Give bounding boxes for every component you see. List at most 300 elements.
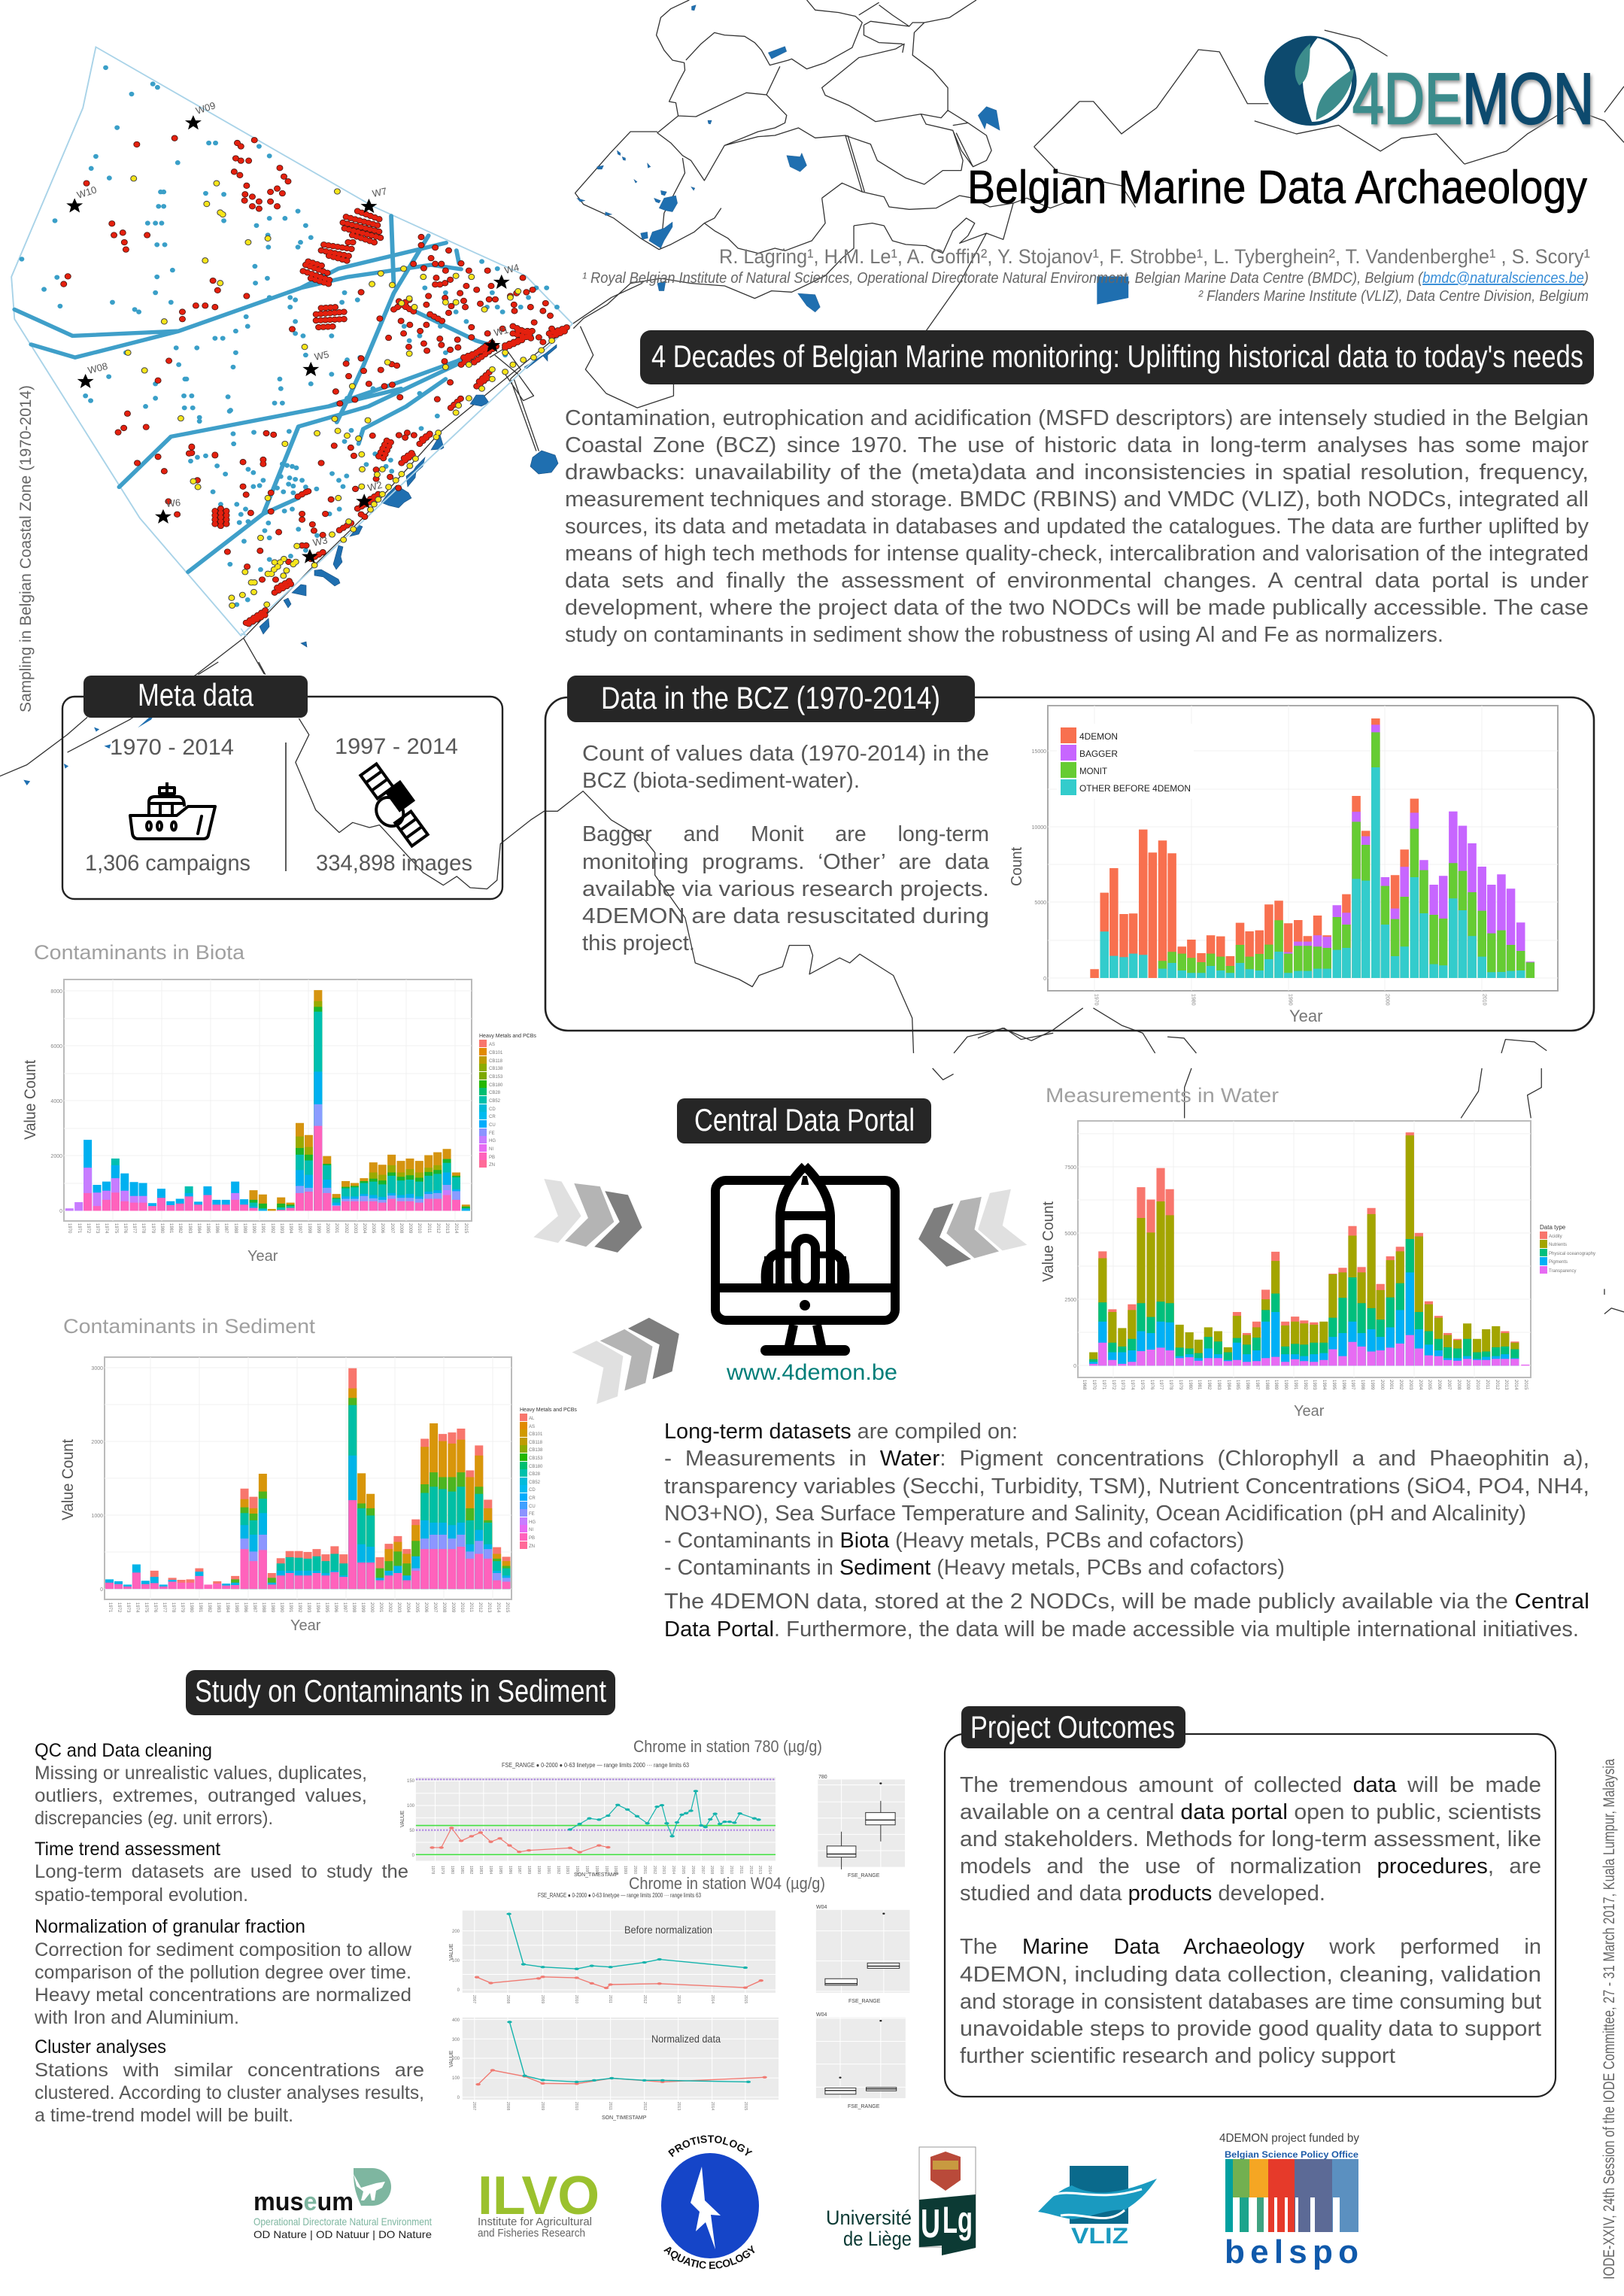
text: normalization: Heavy metal concentrations are normalized: [35, 1985, 411, 2006]
stacked bar chart: measurements in water: 2013: [1504, 1380, 1508, 1390]
stacked bar chart: measurements in water: 1991: [1293, 1380, 1298, 1390]
text: normalization: [34, 1916, 412, 2028]
stacked bar chart: contaminants in sediment: 2000: [369, 1602, 374, 1613]
line chart: chrome 780: 1985: [498, 1866, 502, 1874]
text: data description: available via various research projects.: [582, 877, 989, 901]
line chart: chrome 780: [400, 1762, 776, 1878]
stacked bar chart: contaminants in sediment: 1971: [108, 1602, 112, 1613]
stacked bar chart: measurements in water: 2006: [1437, 1380, 1441, 1390]
stacked bar chart: measurements in water: 2011: [1485, 1380, 1489, 1390]
text: cluster analyses: a time-trend model will be built.: [35, 2105, 293, 2126]
stacked bar chart: contaminants in biota: 2002: [344, 1223, 348, 1234]
text: long-term datasets: transparency variables (Secchi, Turbidity, TSM), Nutrient Concentrations (SiO4, PO4, NH4,: [664, 1474, 1589, 1499]
legend: data type: Data type: [1540, 1224, 1566, 1231]
panel: data in the BCZ: [545, 676, 1594, 1031]
heading: contaminants in biota: Contaminants in Biota: [34, 941, 245, 964]
legend: sediment: Heavy Metals and PCBs: [520, 1408, 577, 1413]
land patches along coast: [260, 345, 558, 647]
stacked bar chart: contaminants in biota: 1976: [123, 1223, 127, 1234]
line chart: chrome 780: 1986: [508, 1866, 512, 1874]
line chart: chrome 780: 1990: [536, 1866, 541, 1874]
legend: biota: [479, 1034, 536, 1168]
stacked bar chart: measurements in water: 2012: [1495, 1380, 1499, 1390]
stacked bar chart: counts 1970-2014: 2000: [1384, 994, 1390, 1006]
legend: sediment: NI: [529, 1528, 533, 1532]
legend: biota: HG: [489, 1139, 496, 1143]
stacked bar chart: contaminants in sediment: 2013: [487, 1602, 491, 1613]
line chart: normalized data: 2014: [710, 2102, 715, 2110]
stacked bar chart: contaminants in biota: 1990: [251, 1223, 256, 1234]
line chart: before normalization: 2010: [574, 1995, 578, 2003]
stacked bar chart: measurements in water: 2005: [1427, 1380, 1431, 1390]
logo: Université de Liège: [826, 2147, 976, 2255]
stacked bar chart: counts 1970-2014: 1970: [1094, 994, 1098, 1006]
stacked bar chart: contaminants in biota: 2009: [408, 1223, 412, 1234]
sampling map: Belgian Coastal Zone: W08: [87, 360, 109, 376]
logo: VLIZ: VLIZ: [1071, 2224, 1128, 2249]
text: outcomes: further scientific research and policy support: [960, 2044, 1395, 2068]
stacked bar chart: contaminants in sediment: 2006: [423, 1602, 428, 1613]
legend: sediment: ZN: [529, 1544, 535, 1549]
stacked bar chart: measurements in water: 1984: [1226, 1380, 1231, 1390]
stacked bar chart: contaminants in biota: 1988: [233, 1223, 238, 1234]
text: outcomes: The Marine Data Archaeology work performed in: [960, 1935, 1541, 1959]
stacked bar chart: contaminants in biota: 1994: [288, 1223, 293, 1234]
introduction paragraph: Coastal Zone (BCZ) since 1970. The use of historic data in long-term analyses has some major: [565, 433, 1589, 457]
legend: biota: CB153: [489, 1075, 503, 1080]
boxplot: before normalization: FSE_RANGE: [848, 1999, 881, 2004]
logo: VLIZ: [1038, 2166, 1157, 2249]
stacked bar chart: contaminants in sediment: 1995: [324, 1602, 329, 1613]
legend: sediment: CB28: [529, 1472, 541, 1477]
sampling map: Belgian Coastal Zone: W6: [165, 497, 181, 509]
stacked bar chart: contaminants in biota: 2012: [436, 1223, 440, 1234]
stacked bar chart: contaminants in sediment: 1988: [261, 1602, 266, 1613]
legend: biota: CB138: [489, 1067, 503, 1071]
legend: data type: Pigments: [1549, 1260, 1568, 1265]
line chart: chrome 780: 2008: [709, 1866, 714, 1874]
line chart: normalized data: 2010: [574, 2102, 578, 2110]
icon: satellite: [352, 759, 435, 852]
stacked bar chart: measurements in water: [1040, 1121, 1595, 1420]
stacked bar chart: measurements in water: 2500: [1064, 1298, 1076, 1303]
legend: data source: BAGGER: [1079, 749, 1118, 759]
boxplot: chrome 780: [818, 1775, 905, 1878]
line chart: chrome 780: 2002: [652, 1866, 657, 1874]
stacked bar chart: counts 1970-2014: 1980: [1190, 994, 1196, 1006]
legend: data source: OTHER BEFORE 4DEMON: [1079, 783, 1191, 794]
line chart: normalized data: 2009: [540, 2102, 545, 2110]
logo: Université de Liège: de Liège: [843, 2228, 912, 2250]
stacked bar chart: contaminants in biota: Year: [247, 1248, 278, 1265]
stacked bar chart: measurements in water: 1972: [1111, 1380, 1116, 1390]
stacked bar chart: contaminants in sediment: 1976: [153, 1602, 157, 1613]
line chart: chrome 780: 1987: [517, 1866, 521, 1874]
stacked bar chart: measurements in water: 1993: [1312, 1380, 1316, 1390]
line chart: chrome 780: SON_TIMESTAMP: [574, 1872, 619, 1878]
stacked bar chart: contaminants in sediment: 1978: [171, 1602, 175, 1613]
stacked bar chart: measurements in water: 2007: [1446, 1380, 1451, 1390]
stacked bar chart: contaminants in biota: 2003: [353, 1223, 357, 1234]
logo: belspo: [1219, 2132, 1359, 2270]
text: cluster analyses: clustered. According to cluster analyses results,: [35, 2082, 424, 2103]
line chart: chrome 780: 2004: [671, 1866, 675, 1874]
stacked bar chart: measurements in water: 1970: [1091, 1380, 1096, 1390]
line chart: normalized data: VALUE: [449, 2050, 454, 2067]
stacked bar chart: contaminants in sediment: 2010: [460, 1602, 464, 1613]
stacked bar chart: contaminants in biota: [22, 979, 536, 1265]
logo: ILVO: Institute for Agricultural: [478, 2216, 592, 2228]
stacked bar chart: measurements in water: 1968: [1082, 1380, 1086, 1390]
line chart: before normalization: 2012: [642, 1995, 647, 2003]
stacked bar chart: contaminants in sediment: 1989: [270, 1602, 275, 1613]
stacked bar chart: contaminants in sediment: 1993: [306, 1602, 311, 1613]
text: cluster analyses: Cluster analyses: [35, 2036, 166, 2058]
heading: contaminants in sediment: Contaminants in Sediment: [63, 1315, 316, 1338]
panel: meta data: 334,898 images: [316, 851, 472, 876]
stacked bar chart: contaminants in biota: 1980: [159, 1223, 164, 1234]
legend: sediment: CU: [529, 1505, 536, 1509]
chart title: chrome 780: Chrome in station 780 (µg/g): [633, 1737, 822, 1756]
introduction paragraph: study on contaminants in sediment show the robustness of using Al and Fe as normalizers.: [565, 623, 1443, 647]
stacked bar chart: measurements in water: 1986: [1245, 1380, 1249, 1390]
stacked bar chart: contaminants in biota: 2014: [454, 1223, 458, 1234]
stacked bar chart: contaminants in sediment: 1982: [207, 1602, 211, 1613]
stacked bar chart: contaminants in sediment: 1990: [279, 1602, 284, 1613]
introduction paragraph: measurement techniques and storage. BMDC (RBINS) and VMDC (VLIZ), both NODCs, integrated all: [565, 487, 1589, 512]
stacked bar chart: measurements in water: 1996: [1341, 1380, 1346, 1390]
logo: ILVO: ILVO: [478, 2166, 600, 2226]
arrows: chevrons towards portal: [533, 1179, 1027, 1404]
stacked bar chart: contaminants in sediment: 2004: [405, 1602, 410, 1613]
authors: R. Lagring¹, H.M. Le¹, A. Goffin², Y. Stojanov¹, F. Strobbe¹, L. Tyberghein², T. Vandenberghe¹ , S. Scory¹: [719, 245, 1590, 268]
text: normalization: Correction for sediment composition to allow: [35, 1939, 412, 1960]
sampling map: Belgian Coastal Zone: W3: [312, 534, 329, 548]
stacked bar chart: contaminants in sediment: 1975: [144, 1602, 148, 1613]
stacked bar chart: contaminants in sediment: 2005: [414, 1602, 419, 1613]
stacked bar chart: contaminants in biota: 0: [59, 1209, 62, 1214]
stacked bar chart: contaminants in sediment: Value Count: [59, 1439, 77, 1520]
heading: study on contaminants in sediment: Study on Contaminants in Sediment: [195, 1673, 606, 1708]
stacked bar chart: contaminants in sediment: 2015: [505, 1602, 509, 1613]
boxplot: before normalization: [816, 1905, 909, 2004]
line chart: before normalization: 2011: [608, 1995, 612, 2003]
sampling map: Belgian Coastal Zone: W2: [366, 479, 384, 494]
stacked bar chart: measurements in water: 5000: [1064, 1232, 1076, 1237]
text: time trend assessment: [35, 1839, 408, 1906]
line chart: normalized data: 2008: [505, 2102, 510, 2110]
line chart: before normalization: Before normalization: [624, 1924, 712, 1936]
line chart: chrome 780: 1984: [488, 1866, 493, 1874]
legend: biota: CB118: [489, 1059, 503, 1064]
stacked bar chart: contaminants in biota: 2010: [417, 1223, 421, 1234]
line chart: before normalization: 2013: [676, 1995, 681, 2003]
text: long-term datasets: Data Portal. Furthermore, the data will be made accessible via multiple international initiatives.: [664, 1617, 1579, 1642]
stacked bar chart: measurements in water: 1987: [1255, 1380, 1259, 1390]
affiliations: ² Flanders Marine Institute (VLIZ), Data Centre Division, Belgium: [1198, 288, 1589, 305]
line chart: chrome 780: 2003: [661, 1866, 666, 1874]
line chart: before normalization: 100: [452, 1959, 460, 1963]
line chart: normalized data: 2011: [608, 2102, 612, 2110]
stacked bar chart: contaminants in sediment: 1998: [351, 1602, 356, 1613]
line chart: chrome 780: 1981: [460, 1866, 464, 1874]
stacked bar chart: contaminants in biota: 2004: [362, 1223, 366, 1234]
stacked bar chart: contaminants in sediment: 2009: [451, 1602, 455, 1613]
line chart: normalized data: 2007: [472, 2102, 476, 2110]
stacked bar chart: measurements in water: 1980: [1188, 1380, 1192, 1390]
stacked bar chart: measurements in water: 2001: [1389, 1380, 1393, 1390]
text: normalization: Normalization of granular fraction: [35, 1916, 305, 1937]
legend: sediment: AL: [529, 1417, 535, 1421]
line chart: chrome 780: 2001: [642, 1866, 647, 1874]
line chart: before normalization: 2009: [540, 1995, 545, 2003]
heading: central data portal: [677, 1098, 931, 1143]
text: long-term datasets: The 4DEMON data, stored at the 2 NODCs, will be made publicly available via the Central: [664, 1590, 1589, 1614]
boxplot: before normalization: W04: [816, 1905, 827, 1910]
line chart: chrome 780: 2009: [719, 1866, 724, 1874]
stacked bar chart: contaminants in biota: 2008: [399, 1223, 403, 1234]
text: long-term datasets: Long-term datasets are compiled on:: [664, 1420, 1018, 1444]
survey tracks: [14, 216, 492, 572]
panel: meta data: 1997 - 2014: [335, 734, 458, 759]
stacked bar chart: counts 1970-2014: 15000: [1032, 749, 1046, 755]
stacked bar chart: contaminants in biota: 1989: [242, 1223, 247, 1234]
line chart: chrome 780: 2007: [700, 1866, 705, 1874]
text: long-term datasets: NO3+NO), Sea Surface Temperature and Salinity, Ocean Acidification (pH and Alcalinity): [664, 1502, 1526, 1526]
stacked bar chart: measurements in water: 2010: [1475, 1380, 1480, 1390]
stacked bar chart: contaminants in biota: 1997: [297, 1223, 302, 1234]
vertical caption: IODE session: IODE-XXIV, 24th Session of the IODE Committee, 27 - 31 March 2017, Kuala Lumpur, Malaysia: [1601, 1759, 1618, 2279]
stacked bar chart: counts 1970-2014: 2010: [1482, 994, 1486, 1006]
stacked bar chart: measurements in water: 1994: [1322, 1380, 1326, 1390]
line chart: normalized data: 2013: [676, 2102, 681, 2110]
legend: biota: CB52: [489, 1099, 501, 1104]
text: data description: [582, 742, 990, 955]
stacked bar chart: measurements in water: 1982: [1207, 1380, 1211, 1390]
stacked bar chart: contaminants in sediment: 2012: [478, 1602, 482, 1613]
boxplot: normalized data: [816, 2012, 906, 2109]
introduction paragraph: development, where the project data of the two NODCs will be made publically accessible. The case: [565, 596, 1589, 620]
line chart: chrome 780: 2005: [681, 1866, 685, 1874]
stacked bar chart: measurements in water: 2009: [1465, 1380, 1470, 1390]
heading: measurements in water: Measurements in Water: [1046, 1084, 1279, 1107]
sampling map: Belgian Coastal Zone: W09: [194, 99, 217, 117]
line chart: chrome 780: 1978: [430, 1866, 435, 1874]
stacked bar chart: measurements in water: 2000: [1380, 1380, 1384, 1390]
stacked bar chart: contaminants in sediment: 2014: [496, 1602, 500, 1613]
line chart: chrome 780: 1998: [613, 1866, 618, 1874]
legend: sediment: CD: [529, 1488, 536, 1493]
legend: biota: CB101: [489, 1051, 503, 1055]
text: data description: BCZ (biota-sediment-water).: [582, 769, 860, 793]
stacked bar chart: contaminants in biota: 1992: [270, 1223, 275, 1234]
stacked bar chart: measurements in water: 1989: [1273, 1380, 1278, 1390]
legend: biota: CB180: [489, 1083, 503, 1088]
stacked bar chart: contaminants in sediment: 1977: [162, 1602, 166, 1613]
line chart: before normalization: 0: [457, 1988, 460, 1993]
stacked bar chart: contaminants in biota: 1978: [141, 1223, 145, 1234]
introduction paragraph: sources, its data and metadata in databases and updated the catalogues. The data are further uplifted by: [565, 515, 1589, 539]
line chart: normalized data: SON_TIMESTAMP: [602, 2115, 647, 2121]
stacked bar chart: counts 1970-2014: 10000: [1032, 825, 1046, 831]
stacked bar chart: measurements in water: 0: [1073, 1364, 1076, 1369]
panel: meta data: 1970 - 2014: [110, 735, 234, 760]
legend: sediment: HG: [529, 1520, 536, 1525]
line chart: normalized data: 400: [452, 2018, 460, 2023]
stacked bar chart: measurements in water: 1976: [1149, 1380, 1154, 1390]
stacked bar chart: contaminants in sediment: 1986: [243, 1602, 247, 1613]
stacked bar chart: contaminants in sediment: 1972: [117, 1602, 121, 1613]
legend: sediment: CB180: [529, 1465, 543, 1469]
blue stations: [22, 68, 557, 605]
line chart: before normalization: VALUE: [449, 1943, 454, 1960]
text: QC and data cleaning: discrepancies (eg. unit errors).: [35, 1808, 273, 1829]
stacked bar chart: measurements in water: 1981: [1197, 1380, 1201, 1390]
icon: monitor with rocket: [715, 1166, 895, 1356]
legend: biota: CB28: [489, 1091, 501, 1095]
logo: museum: Operational Directorate Natural Environment: [253, 2216, 432, 2228]
stacked bar chart: contaminants in biota: 2015: [463, 1223, 468, 1234]
stacked bar chart: contaminants in biota: 1984: [196, 1223, 201, 1234]
legend: biota: NI: [489, 1147, 493, 1152]
chart title: chrome W04: Chrome in station W04 (µg/g): [629, 1874, 825, 1893]
text: long-term datasets: - Measurements in Water: Pigment concentrations (Chlorophyll a and Phaeophitin a),: [664, 1447, 1589, 1471]
icon: ship: [130, 782, 215, 839]
stacked bar chart: measurements in water: 1977: [1158, 1380, 1163, 1390]
4DEMON logo: [1264, 36, 1594, 139]
line chart: chrome 780: 150: [407, 1779, 415, 1784]
stacked bar chart: contaminants in biota: 1985: [205, 1223, 210, 1234]
text: outcomes: The tremendous amount of collected data will be made: [960, 1773, 1541, 1797]
text: long-term datasets: - Contaminants in Biota (Heavy metals, PCBs and cofactors): [664, 1529, 1244, 1553]
stacked bar chart: measurements in water: 2002: [1398, 1380, 1403, 1390]
url: 4demon.be: www.4demon.be: [726, 1360, 897, 1385]
stacked bar chart: contaminants in sediment: 0: [100, 1587, 103, 1593]
line chart: before normalization: 2008: [505, 1995, 510, 2003]
introduction paragraph: drawbacks: unavailability of the (meta)data and inconsistencies in spatial resolution, frequency,: [565, 460, 1589, 484]
stacked bar chart: measurements in water: 1974: [1130, 1380, 1134, 1390]
stacked bar chart: contaminants in biota: 1970: [67, 1223, 71, 1234]
legend: biota: CU: [489, 1123, 496, 1128]
logo: museum: OD Nature | OD Natuur | DO Nature: [253, 2228, 432, 2240]
heading: meta data: [83, 676, 308, 718]
stacked bar chart: measurements in water: 2014: [1513, 1380, 1518, 1390]
legend: data type: Transparency: [1549, 1269, 1576, 1274]
stacked bar chart: contaminants in sediment: 1980: [189, 1602, 193, 1613]
stacked bar chart: contaminants in sediment: 1984: [225, 1602, 229, 1613]
text: QC and data cleaning: outliers, extremes, outranged values,: [35, 1785, 367, 1806]
stacked bar chart: contaminants in biota: 2000: [325, 1223, 329, 1234]
stacked bar chart: measurements in water: 1975: [1140, 1380, 1144, 1390]
line chart: normalized data: 0: [457, 2096, 460, 2100]
stacked bar chart: contaminants in biota: 1999: [316, 1223, 320, 1234]
sampling map: Belgian Coastal Zone: W5: [314, 348, 330, 363]
logo: Université de Liège: Université: [826, 2206, 912, 2229]
stacked bar chart: contaminants in biota: 2007: [390, 1223, 394, 1234]
stacked bar chart: contaminants in biota: 1979: [150, 1223, 155, 1234]
stacked bar chart: contaminants in sediment: 1981: [198, 1602, 202, 1613]
stacked bar chart: contaminants in biota: 1983: [187, 1223, 192, 1234]
sampling map: Belgian Coastal Zone: [11, 47, 572, 647]
legend: sediment: CB118: [529, 1441, 543, 1445]
legend: sediment: CB153: [529, 1456, 543, 1461]
stacked bar chart: measurements in water: 1973: [1120, 1380, 1125, 1390]
vertical caption: sampling: Sampling in Belgian Coastal Zone (1970-2014): [17, 385, 35, 712]
legend: data type: Physical oceanography: [1549, 1252, 1595, 1256]
line chart: chrome 780: 50: [409, 1829, 415, 1833]
text: time trend assessment: Long-term datasets are used to study the: [35, 1861, 408, 1882]
legend: sediment: CB52: [529, 1481, 541, 1485]
text: long-term datasets: - Contaminants in Sediment (Heavy metals, PCBs and cofactors): [664, 1556, 1285, 1580]
line chart: chrome 780: 1996: [594, 1866, 599, 1874]
logo: ILVO: and Fisheries Research: [478, 2227, 585, 2240]
stacked bar chart: contaminants in biota: 2006: [380, 1223, 384, 1234]
legend: biota: AS: [489, 1043, 495, 1047]
line chart: chrome 780: 2010: [729, 1866, 733, 1874]
legend: data source: [1057, 724, 1194, 799]
line chart: chrome 780: 1999: [623, 1866, 627, 1874]
text: outcomes: and storage in consistent databases are time consuming but: [960, 1990, 1541, 2014]
stacked bar chart: contaminants in sediment: 1991: [288, 1602, 293, 1613]
stacked bar chart: contaminants in sediment: 2002: [387, 1602, 392, 1613]
stacked bar chart: counts 1970-2014: [1009, 706, 1558, 1025]
legend: sediment: FE: [529, 1512, 535, 1517]
stacked bar chart: measurements in water: 1999: [1370, 1380, 1374, 1390]
stacked bar chart: contaminants in sediment: 2003: [396, 1602, 401, 1613]
stacked bar chart: contaminants in biota: 1982: [178, 1223, 182, 1234]
sampling map: Belgian Coastal Zone: W4: [503, 262, 521, 276]
legend: data type: [1540, 1224, 1595, 1274]
stacked bar chart: contaminants in sediment: 2011: [469, 1602, 473, 1613]
line chart: chrome 780: 2006: [691, 1866, 695, 1874]
line chart: normalized data: 2015: [743, 2102, 748, 2110]
banner: 4 decades: [640, 330, 1594, 384]
text: data description: monitoring programs. ‘Other’ are data: [582, 850, 990, 874]
stacked bar chart: contaminants in biota: 2013: [445, 1223, 449, 1234]
heading: data in the BCZ: Data in the BCZ (1970-2014): [601, 680, 940, 715]
line chart: normalized data: 300: [452, 2038, 460, 2042]
line chart: chrome 780: 2000: [633, 1866, 637, 1874]
stacked bar chart: contaminants in sediment: 1974: [135, 1602, 139, 1613]
logo: belspo: 4DEMON project funded by: [1219, 2132, 1359, 2145]
line chart: before normalization: [449, 1892, 776, 2003]
red stations: [64, 138, 570, 624]
yellow stations: [128, 178, 552, 606]
stacked bar chart: measurements in water: 2008: [1456, 1380, 1461, 1390]
logo: belspo: Belgian Science Policy Office: [1225, 2149, 1358, 2160]
stacked bar chart: contaminants in biota: 1998: [307, 1223, 311, 1234]
arrow: from sediment: [572, 1318, 679, 1404]
legend: sediment: CB138: [529, 1448, 543, 1453]
stacked bar chart: contaminants in sediment: 1996: [333, 1602, 338, 1613]
line chart: chrome 780: 1980: [450, 1866, 454, 1874]
boxplot: normalized data: FSE_RANGE: [848, 2104, 880, 2109]
4DEMON logo: 4DEMON: [1352, 59, 1594, 139]
stacked bar chart: contaminants in sediment: 1994: [315, 1602, 320, 1613]
stacked bar chart: contaminants in biota: 1993: [279, 1223, 284, 1234]
line chart: chrome 780: 1989: [527, 1866, 531, 1874]
introduction paragraph: Contamination, eutrophication and acidification (MSFD descriptors) are intensely studied in the Belgian: [565, 406, 1589, 430]
stacked bar chart: contaminants in sediment: 1997: [342, 1602, 347, 1613]
line chart: before normalization: 200: [452, 1930, 460, 1934]
text: cluster analyses: Stations with similar concentrations are: [35, 2060, 424, 2081]
stacked bar chart: contaminants in biota: Value Count: [22, 1060, 39, 1140]
text: normalization: comparison of the pollution degree over time.: [35, 1962, 411, 1983]
heading: central data portal: Central Data Portal: [694, 1102, 915, 1137]
panel: meta data: [62, 676, 502, 899]
introduction paragraph: data sets and finally the assessment of environmental changes. A central data portal is under: [565, 569, 1589, 593]
stacked bar chart: measurements in water: 1997: [1350, 1380, 1355, 1390]
